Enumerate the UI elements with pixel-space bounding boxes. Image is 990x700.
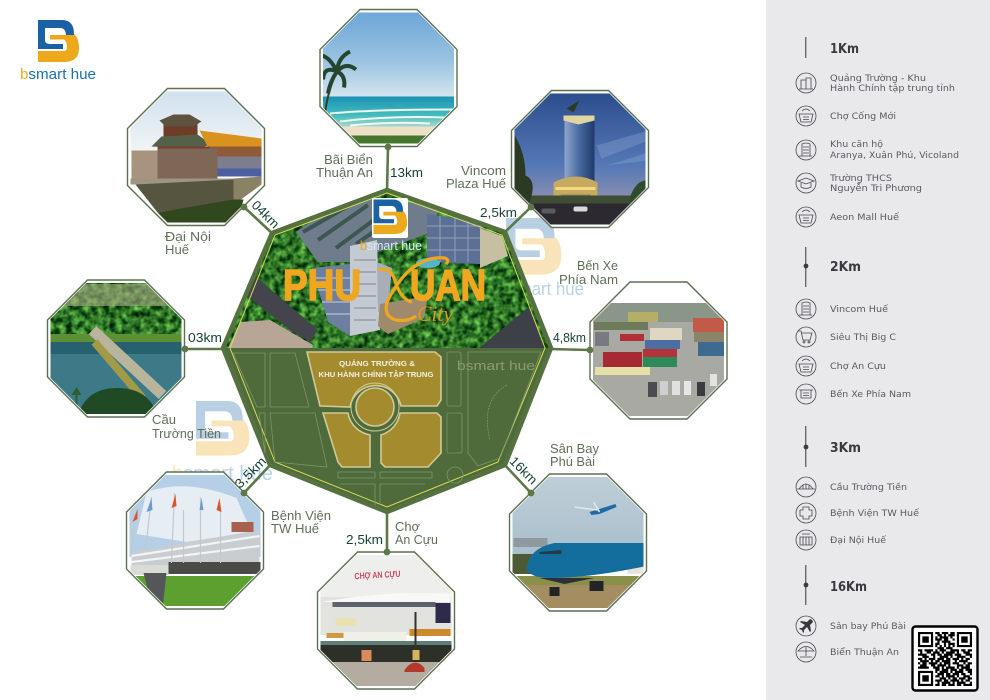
connectors from hub to photos <box>182 144 593 555</box>
photo: Cho An Cuu: CHỢ AN CỰU <box>354 569 401 581</box>
photo: Bai Bien Thuan An <box>320 10 457 146</box>
hub upper image: aerial view <box>220 188 555 350</box>
place label: Bai Bien Thuan An: Thuận An <box>316 165 373 180</box>
item: Benh Vien TW Hue: Bệnh Viện TW Huế <box>830 508 920 519</box>
place label: Cau Truong Tien: Trường Tiền <box>152 426 221 441</box>
item: Dai Noi Hue: Đại Nội Huế <box>830 535 887 546</box>
distance label: 03km: 03km <box>188 330 222 345</box>
logo: bsmart hue: bsmart hue <box>20 66 96 83</box>
place label: Dai Noi Hue <box>165 229 211 257</box>
photo: Cho An Cuu <box>318 552 454 689</box>
distance label: 2,5km Cho An Cuu: 2,5km <box>346 532 383 547</box>
photo: San Bay Phu Bai <box>510 474 646 612</box>
item: Ben Xe Phia Nam <box>796 384 911 404</box>
item: Khu can ho: Khu căn hộ <box>830 139 883 150</box>
distance label: 04km: 04km <box>249 197 283 231</box>
item: Quang Truong <box>796 73 955 94</box>
title: Phu Xuan City <box>283 258 486 326</box>
item: Khu can ho: Aranya, Xuân Phú, Vicoland <box>830 151 959 161</box>
item: Bien Thuan An: Biển Thuận An <box>830 647 899 658</box>
hub watermark text: bsmart hue <box>457 358 535 373</box>
photo: Vincom Plaza Hue <box>512 90 648 228</box>
distance label: 16km: 16km <box>507 453 541 487</box>
item: Truong THCS: Nguyễn Tri Phương <box>830 183 922 194</box>
section: 3Km: 3Km <box>830 441 861 456</box>
item: Cho An Cuu <box>796 356 886 376</box>
place label: Cau Truong Tien: Cầu <box>152 412 176 427</box>
place label: Cho An Cuu: Chợ <box>395 519 420 534</box>
item: Bien Thuan An <box>796 642 899 662</box>
title: Phu Xuan City: UAN <box>410 261 486 310</box>
item: Cho Cong Moi <box>796 106 896 126</box>
place label: Ben Xe Phia Nam <box>559 258 618 287</box>
section: 1Km: 1Km <box>830 42 859 57</box>
watermark logo lower left: bsmart hue <box>172 463 273 485</box>
place label: Benh Vien TW Hue <box>271 508 331 536</box>
section: 2Km <box>804 247 861 287</box>
title: Phu Xuan City: City <box>417 301 453 326</box>
title: Phu Xuan City: PHU <box>283 261 361 310</box>
place label: Cho An Cuu: An Cựu <box>395 532 438 547</box>
logo: bsmart hue <box>20 20 96 83</box>
hub outer stroke <box>223 190 551 512</box>
place label: Dai Noi Hue: Đại Nội <box>165 229 211 244</box>
item: Truong THCS <box>796 173 922 194</box>
distance label: 4,8km: 4,8km <box>553 330 586 345</box>
item: Cho An Cuu: Chợ An Cựu <box>830 362 886 372</box>
item: Aeon Mall Hue <box>796 207 900 227</box>
panel: distance list <box>766 0 990 700</box>
distance label: 2,5km Vincom: 2,5km <box>480 205 517 220</box>
hub logo: bsmart hue <box>360 238 422 253</box>
watermark logo right of centre <box>500 218 584 299</box>
plaza caption: QUẢNG TRƯỜNG & <box>339 359 416 368</box>
item: Dai Noi Hue <box>796 530 887 550</box>
item: Vincom Hue <box>796 299 889 319</box>
item: Truong THCS: Trường THCS <box>829 173 892 184</box>
place label: Vincom Plaza Hue <box>446 163 507 191</box>
item: Sieu Thi Big C: Siêu Thị Big C <box>830 332 896 343</box>
distance label: 3,5km: 3,5km <box>232 454 269 491</box>
place label: Ben Xe Phia Nam: Phía Nam <box>559 272 618 287</box>
QR code <box>912 626 978 690</box>
place label: Dai Noi Hue: Huế <box>165 242 190 257</box>
item: San bay Phu Bai <box>796 616 906 636</box>
place label: Bai Bien Thuan An: Bãi Biển <box>324 152 373 167</box>
section: 3Km <box>804 426 861 467</box>
place label: Benh Vien TW Hue: Bệnh Viện <box>271 508 331 523</box>
watermark logo lower left <box>172 401 273 485</box>
plaza blocks <box>307 352 441 467</box>
item: San bay Phu Bai: Sân bay Phú Bài <box>830 622 906 632</box>
section: 1Km <box>805 37 859 58</box>
item: Quang Truong: Quảng Trường - Khu <box>830 73 926 84</box>
plaza caption: KHU HÀNH CHÍNH TẬP TRUNG <box>318 370 434 379</box>
plaza ring road <box>351 383 399 431</box>
item: Khu can ho <box>796 139 959 161</box>
item: Cau Truong Tien: Cầu Trường Tiền <box>830 482 907 493</box>
item: Cau Truong Tien <box>796 477 907 497</box>
hub octagon <box>220 188 555 512</box>
section: 16Km <box>804 565 867 605</box>
section: 2Km: 2Km <box>830 260 861 275</box>
photo: Dai Noi Hue <box>128 88 264 226</box>
item: Quang Truong: Hành Chính tập trung tỉnh <box>830 83 955 94</box>
place label: Benh Vien TW Hue: TW Huế <box>271 521 320 536</box>
hub inner yellow line <box>230 193 545 507</box>
place label: Ben Xe Phia Nam: Bến Xe <box>577 258 618 273</box>
item: Aeon Mall Hue: Aeon Mall Huế <box>830 212 900 223</box>
plaza caption <box>318 359 434 379</box>
item: Vincom Hue: Vincom Huế <box>830 304 889 315</box>
place label: Vincom Plaza Hue: Plaza Huế <box>446 176 507 191</box>
place label: Bai Bien Thuan An <box>316 152 373 180</box>
place label: Vincom Plaza Hue: Vincom <box>461 163 506 178</box>
place label: Cho An Cuu <box>395 519 438 547</box>
item: Cho Cong Moi: Chợ Cống Mới <box>830 111 896 122</box>
hub logo <box>360 198 422 253</box>
watermark logo right of centre: bsmart hue <box>500 279 584 299</box>
distance label: 13km: 13km <box>390 165 423 180</box>
place label: San Bay Phu Bai: Phú Bài <box>550 454 595 469</box>
section: 16Km: 16Km <box>830 580 867 595</box>
place label: San Bay Phu Bai: Sân Bay <box>550 441 599 456</box>
photo: Benh Vien TW Hue <box>126 472 264 609</box>
item: Benh Vien TW Hue <box>796 503 920 523</box>
place label: San Bay Phu Bai <box>550 441 599 469</box>
photo: Cau Truong Tien <box>48 280 184 417</box>
item: Ben Xe Phia Nam: Bến Xe Phía Nam <box>830 389 911 400</box>
place label: Cau Truong Tien <box>152 412 221 441</box>
photo: Ben Xe Phia Nam <box>590 282 727 419</box>
item: Sieu Thi Big C <box>796 327 896 347</box>
hub lower street blocks <box>233 352 541 505</box>
